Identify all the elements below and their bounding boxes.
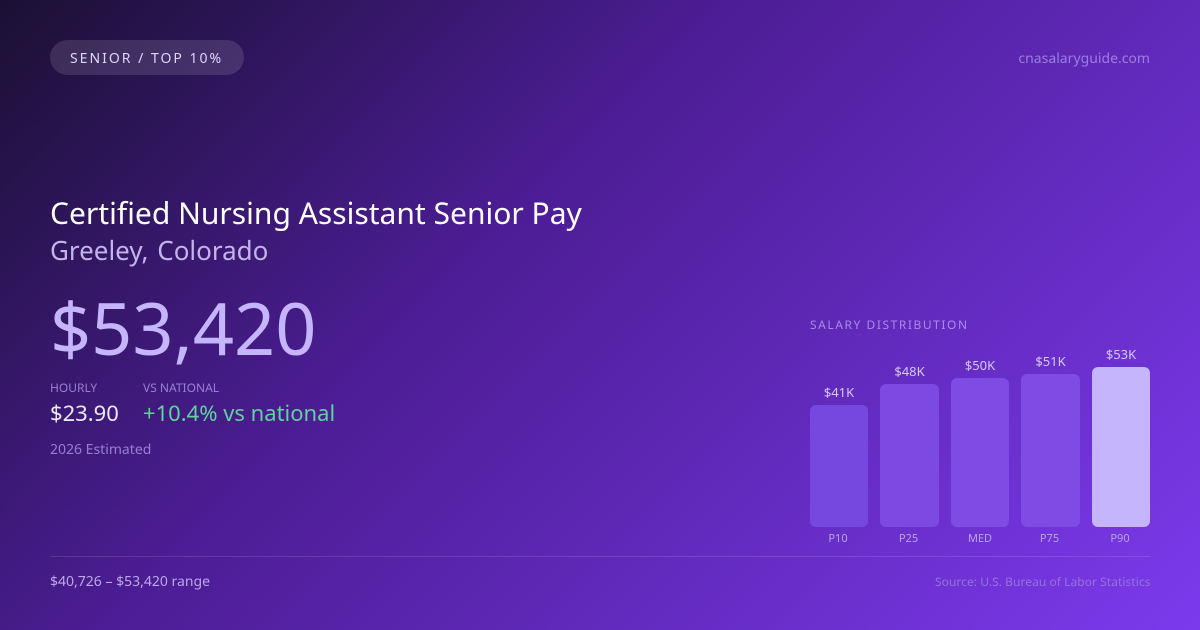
location subtitle: Greeley, Colorado — [50, 232, 268, 268]
value median: $50K — [965, 356, 995, 374]
badge: senior / top 10% — [50, 40, 244, 75]
label P25: P25 — [899, 531, 918, 546]
bar P10 — [810, 405, 868, 527]
bar P25 — [880, 384, 939, 527]
salary range: $40,726 – $53,420 range — [50, 572, 210, 591]
vs national value: +10.4% vs national — [143, 398, 335, 428]
hourly label: HOURLY — [50, 379, 97, 396]
value P10: $41K — [824, 383, 854, 401]
value P90: $53K — [1106, 345, 1136, 363]
site domain: cnasalaryguide.com — [1018, 49, 1150, 68]
label P10: P10 — [828, 531, 848, 546]
value P25: $48K — [894, 362, 925, 380]
main salary: $53,420 — [50, 279, 316, 377]
bar P75 — [1021, 374, 1080, 527]
source: Source: U.S. Bureau of Labor Statistics — [935, 573, 1150, 590]
chart: salary distribution — [810, 316, 1150, 546]
label median: MED — [968, 531, 992, 546]
year note: 2026 Estimated — [50, 440, 151, 459]
stat: hourly — [50, 379, 119, 428]
label P90: P90 — [1110, 531, 1130, 546]
chart heading: SALARY DISTRIBUTION — [810, 316, 969, 333]
vs national label: VS NATIONAL — [143, 379, 219, 396]
title: Certified Nursing Assistant Senior Pay — [50, 192, 582, 233]
bar median — [951, 378, 1009, 527]
label P75: P75 — [1040, 531, 1059, 546]
badge label: SENIOR / TOP 10% — [70, 49, 223, 68]
bar P90 — [1092, 367, 1150, 527]
stat: vs national — [143, 379, 335, 428]
value P75: $51K — [1035, 352, 1066, 370]
hourly value: $23.90 — [50, 398, 119, 428]
